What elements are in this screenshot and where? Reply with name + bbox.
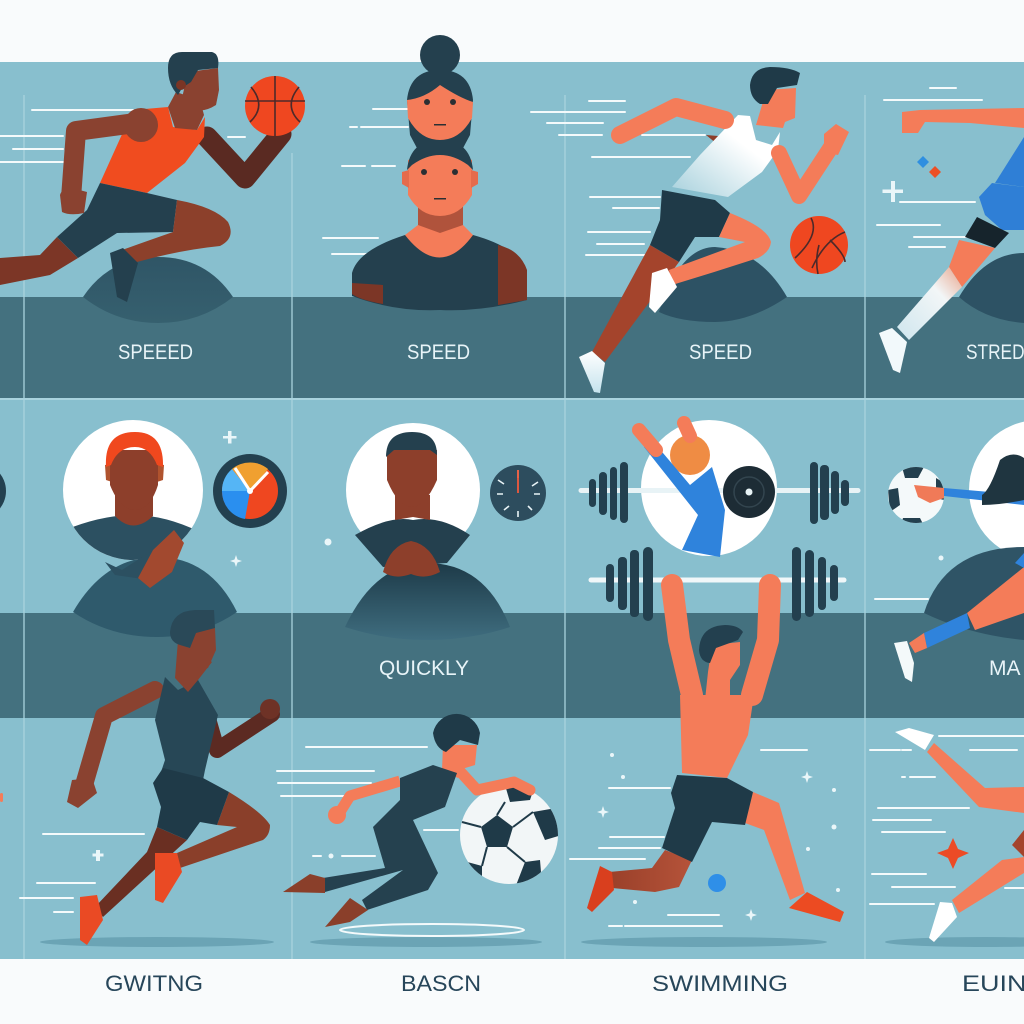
neck <box>115 495 153 526</box>
ear <box>176 80 186 90</box>
back leg <box>592 245 679 362</box>
neck <box>395 495 430 520</box>
basketball <box>790 216 848 274</box>
hair <box>170 610 215 648</box>
torso <box>680 695 754 778</box>
dome pedestal <box>959 253 1024 323</box>
arm <box>498 245 527 305</box>
shorts <box>662 775 753 862</box>
shoulder <box>124 108 158 142</box>
front leg <box>177 792 270 868</box>
icon: gauge cropped at left edge <box>0 463 6 519</box>
white tank top <box>672 115 780 197</box>
hair <box>699 625 743 663</box>
far arm <box>209 714 272 750</box>
shoe <box>110 248 138 302</box>
upper hair <box>407 70 473 154</box>
figure: blue outfit runner, cropped <box>879 108 1024 373</box>
black band <box>965 217 1009 248</box>
icon: small decorative dots and sparkles <box>92 181 944 921</box>
face <box>387 450 437 507</box>
front leg <box>745 792 805 900</box>
neck shadow <box>418 205 463 233</box>
head <box>670 435 710 475</box>
front shoe <box>789 892 844 922</box>
far shoulder <box>706 135 730 148</box>
lower leg <box>952 857 1024 913</box>
shoe <box>894 641 914 682</box>
upper face <box>407 85 473 140</box>
band: upper dark stripe <box>0 297 1024 398</box>
arms <box>672 585 770 695</box>
arm over ball <box>457 768 530 790</box>
hand <box>824 124 849 155</box>
dark shirt <box>74 516 192 560</box>
near arm <box>620 107 725 135</box>
body and arm <box>644 440 725 557</box>
hair <box>168 52 218 95</box>
disc weight <box>723 466 775 518</box>
shoe <box>879 328 907 373</box>
icon: gauge pie <box>213 454 287 528</box>
blue dot <box>708 874 726 892</box>
upper leg <box>927 743 1024 813</box>
diamonds <box>917 156 941 178</box>
figure: lower-left runner in dark tank <box>67 610 280 945</box>
arm <box>352 283 383 304</box>
hoop ring <box>340 924 524 936</box>
blue top <box>1015 553 1024 568</box>
white circle <box>346 423 480 557</box>
label: ma: MA <box>989 657 1020 680</box>
figure: circle portrait with orange cap <box>60 420 237 637</box>
near arm <box>71 122 143 198</box>
figure: basketball runner <box>0 52 305 323</box>
hair <box>750 67 800 104</box>
chest and neck <box>168 92 204 130</box>
front shoe <box>649 268 677 313</box>
white circle <box>969 420 1024 560</box>
blue sock <box>924 613 970 648</box>
bar <box>581 488 858 493</box>
label: euini: EUINI <box>962 971 1024 996</box>
sock <box>897 267 962 340</box>
top shoe <box>895 728 934 750</box>
ears <box>402 170 478 188</box>
hand <box>138 530 184 588</box>
band: middle dark stripe <box>0 613 1024 718</box>
lower hair <box>407 140 473 170</box>
upper leg <box>967 567 1024 630</box>
figure: circle portrait with clasped hands <box>345 423 510 640</box>
blue arm <box>944 488 1024 505</box>
fist <box>328 806 346 824</box>
feet <box>325 898 368 927</box>
back shoe <box>80 895 103 945</box>
front leg <box>122 200 231 262</box>
label: quickly: QUICKLY <box>379 657 469 680</box>
dark bodysuit <box>323 765 457 910</box>
back leg <box>609 850 692 892</box>
figure: stacked portrait heads <box>352 35 527 310</box>
fist <box>260 699 280 719</box>
dark shirt <box>355 519 470 567</box>
hair <box>433 714 480 752</box>
bun <box>420 35 460 75</box>
near arm <box>340 781 400 812</box>
figure: weightlifter runner <box>587 547 844 922</box>
orange tank top <box>100 107 205 193</box>
ankle <box>909 633 927 653</box>
raised hands <box>639 430 656 450</box>
neck and chest <box>405 200 473 258</box>
plates <box>589 462 849 524</box>
red star <box>937 838 969 869</box>
white circle <box>63 420 203 560</box>
label: speed 1: SPEEED <box>118 341 193 364</box>
basketball <box>245 76 305 136</box>
lower shoe <box>929 902 957 942</box>
neck and chest <box>175 640 212 692</box>
back shoe <box>579 351 605 393</box>
head <box>182 68 219 110</box>
clasped hands <box>383 541 440 577</box>
dark tank <box>155 677 218 780</box>
figure: lower-right runner, cropped <box>0 728 1024 942</box>
ground shadows <box>40 937 1024 947</box>
figure: white tank runner <box>579 67 849 393</box>
dome pedestal <box>659 247 787 322</box>
label: bascn: BASCN <box>401 971 481 996</box>
shorts <box>57 183 177 258</box>
back leg <box>95 827 187 917</box>
shorts <box>650 190 730 262</box>
lower shirt <box>105 545 172 580</box>
blue shorts <box>979 183 1024 230</box>
front leg <box>669 213 771 285</box>
arm and fist <box>902 108 1024 133</box>
far arm <box>207 134 281 178</box>
dome pedestal <box>345 563 510 640</box>
dome pedestal <box>73 557 237 637</box>
figure: circle portrait with soccer ball, cropped <box>888 420 1024 682</box>
face <box>184 628 216 668</box>
lower face <box>408 152 472 216</box>
soccer ball <box>888 467 944 523</box>
shorts <box>153 768 229 840</box>
hand <box>67 778 97 808</box>
orange cap <box>106 432 163 467</box>
shin edge <box>1012 830 1024 857</box>
dome pedestal <box>83 257 233 323</box>
front shoe <box>155 853 182 903</box>
barbell <box>591 578 844 582</box>
figure: gymnast in circle with barbell <box>581 420 858 557</box>
feet <box>283 874 325 893</box>
soccer ball <box>460 788 558 884</box>
back leg <box>0 237 78 285</box>
dark shirt <box>352 235 527 310</box>
near arm <box>84 690 155 785</box>
fist <box>60 188 87 214</box>
figure: soccer player diving <box>283 714 562 936</box>
back shoe <box>587 866 614 912</box>
icon: dial gauge <box>490 465 546 521</box>
face and neck <box>705 642 740 700</box>
label: swimming: SWIMMING <box>652 971 788 996</box>
far arm <box>779 141 835 196</box>
ears <box>105 464 164 482</box>
neck and face <box>756 88 796 128</box>
face <box>110 450 158 510</box>
raised hands <box>684 423 690 436</box>
plates <box>606 547 838 621</box>
neck and face <box>442 745 477 778</box>
hand <box>914 485 944 503</box>
label: gwitng: GWITNG <box>105 971 203 996</box>
label: speed 3: SPEED <box>689 341 752 364</box>
white circle <box>641 420 777 556</box>
hair <box>386 432 437 457</box>
hair <box>982 454 1024 505</box>
label: speed 2: SPEED <box>407 341 470 364</box>
facial features <box>421 99 458 200</box>
dome pedestal <box>924 547 1024 640</box>
blue top <box>995 137 1024 187</box>
leg <box>949 240 995 287</box>
